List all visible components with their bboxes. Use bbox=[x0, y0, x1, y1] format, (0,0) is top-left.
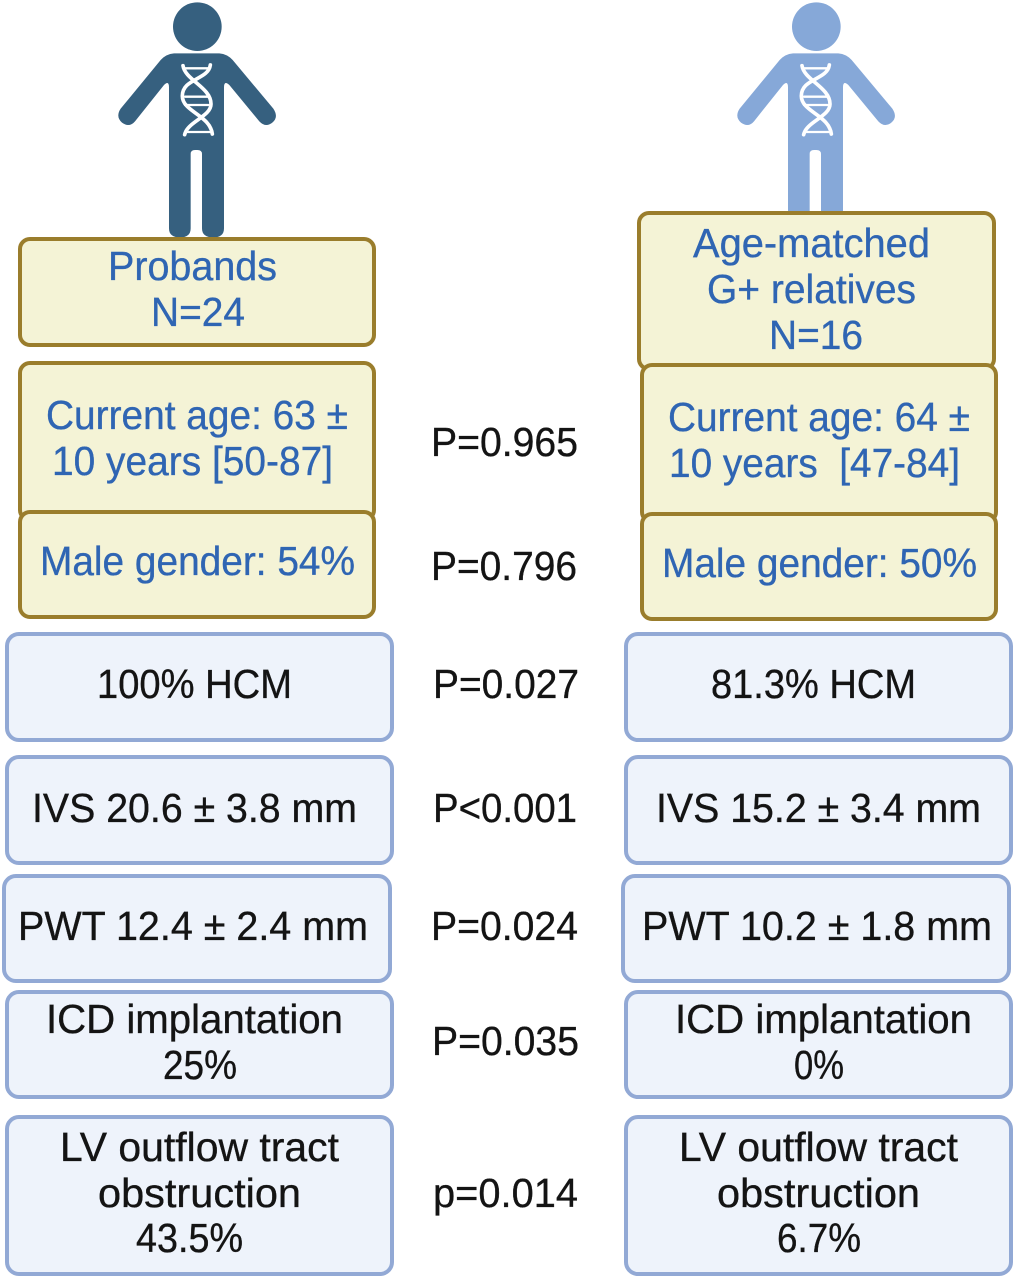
panel: relative current age: 10 years [47-84] bbox=[669, 440, 960, 486]
panel: relatives heading: Age-matched bbox=[693, 220, 930, 266]
panel: probands heading: N=24 bbox=[151, 289, 245, 335]
panel: relatives heading: G+ relatives bbox=[707, 266, 916, 312]
panel: relative LV outflow obstruction: obstruction bbox=[717, 1170, 920, 1216]
p-value: LV outflow: p=0.014 bbox=[433, 1170, 578, 1216]
icon: proband person with DNA bbox=[118, 2, 276, 237]
panel: relatives heading bbox=[639, 213, 994, 369]
panel: relative LV outflow obstruction bbox=[626, 1117, 1011, 1274]
panel: relative HCM: 81.3% HCM bbox=[711, 661, 916, 707]
panel: relative IVS: IVS 15.2 ± 3.4 mm bbox=[656, 785, 981, 831]
panel: proband current age: Current age: 63 ± bbox=[46, 392, 348, 438]
panel: proband male gender bbox=[20, 512, 374, 617]
panel: relative PWT: PWT 10.2 ± 1.8 mm bbox=[642, 903, 992, 949]
icon: relative person with DNA bbox=[737, 2, 895, 237]
panel: proband LV outflow obstruction: 43.5% bbox=[136, 1215, 243, 1261]
panel: probands heading: Probands bbox=[108, 243, 277, 289]
panel: relative HCM bbox=[626, 634, 1011, 740]
p-value: HCM: P=0.027 bbox=[433, 661, 579, 707]
p-value: PWT: P=0.024 bbox=[431, 903, 578, 949]
panel: relative PWT bbox=[623, 876, 1009, 981]
panel: proband PWT bbox=[4, 876, 390, 981]
p-value: male gender: P=0.796 bbox=[431, 543, 577, 589]
panel: proband HCM: 100% HCM bbox=[97, 661, 292, 707]
panel: relatives heading: N=16 bbox=[769, 312, 863, 358]
p-value: IVS: P<0.001 bbox=[433, 785, 577, 831]
panel: relative LV outflow obstruction: LV outflow tract bbox=[679, 1124, 959, 1170]
panel: proband IVS: IVS 20.6 ± 3.8 mm bbox=[32, 785, 357, 831]
panel: proband ICD: 25% bbox=[163, 1042, 237, 1088]
panel: relative current age: Current age: 64 ± bbox=[668, 394, 970, 440]
p-values column bbox=[431, 419, 579, 1216]
panel: proband HCM bbox=[7, 634, 392, 740]
panel: relative ICD: 0% bbox=[794, 1042, 844, 1088]
panel: proband IVS bbox=[7, 757, 392, 863]
p-value: ICD: P=0.035 bbox=[432, 1018, 579, 1064]
panel: relative ICD: ICD implantation bbox=[675, 996, 972, 1042]
panel: proband LV outflow obstruction: LV outflow tract bbox=[60, 1124, 340, 1170]
panel: proband ICD: ICD implantation bbox=[46, 996, 343, 1042]
panel: proband PWT: PWT 12.4 ± 2.4 mm bbox=[18, 903, 368, 949]
panel: proband LV outflow obstruction bbox=[7, 1117, 392, 1274]
panel: proband ICD bbox=[7, 992, 392, 1097]
panel: relative male gender bbox=[642, 514, 996, 619]
panel: proband current age bbox=[20, 363, 374, 520]
panel: relative ICD bbox=[626, 992, 1011, 1097]
panel: relative LV outflow obstruction: 6.7% bbox=[777, 1215, 861, 1261]
panel: relative male gender: Male gender: 50% bbox=[662, 540, 977, 586]
panel: relative IVS bbox=[626, 757, 1011, 863]
panel: probands heading bbox=[20, 239, 374, 345]
panel: proband current age: 10 years [50-87] bbox=[52, 438, 333, 484]
panel: proband male gender: Male gender: 54% bbox=[40, 538, 355, 584]
p-value: current age: P=0.965 bbox=[431, 419, 578, 465]
panel: relative current age bbox=[642, 365, 996, 522]
panel: proband LV outflow obstruction: obstruction bbox=[98, 1170, 301, 1216]
